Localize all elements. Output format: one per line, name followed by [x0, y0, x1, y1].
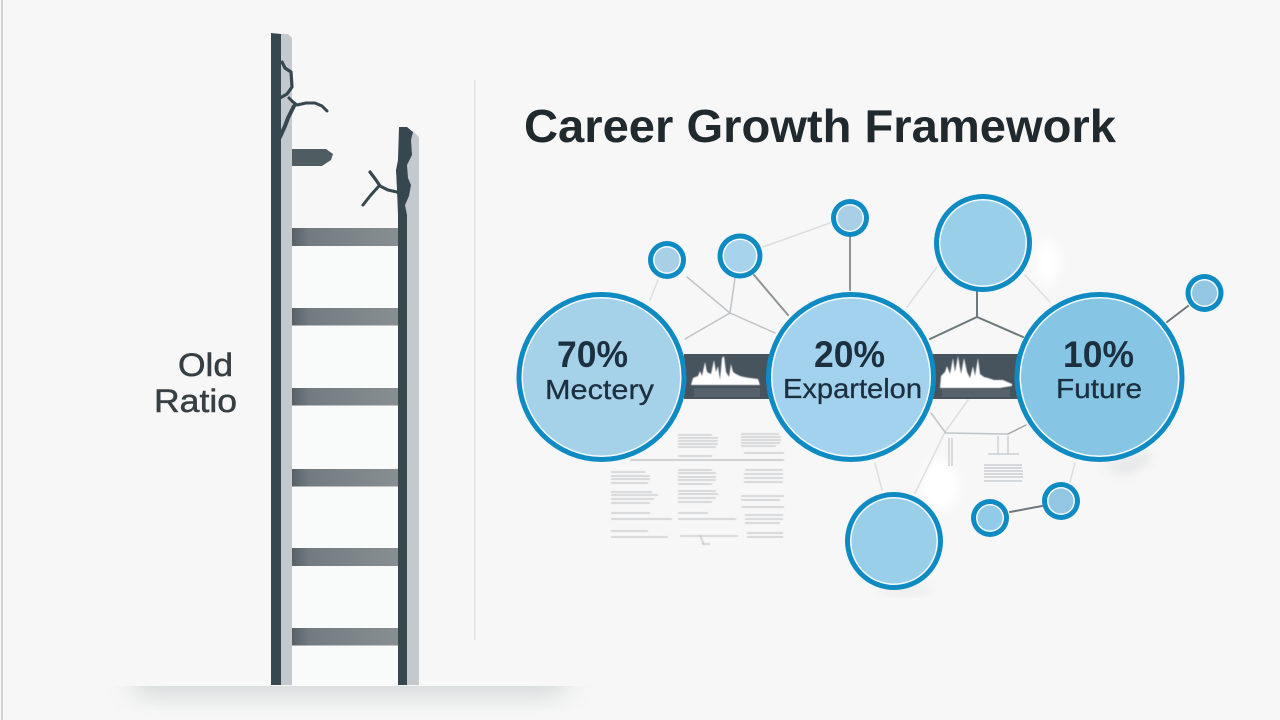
node: 10% Future	[1014, 292, 1184, 462]
label: Old Ratio	[154, 347, 237, 419]
connector bar: 20% to 10%	[932, 354, 1020, 399]
small node 6	[971, 499, 1009, 537]
node: 10% Future: 10%	[1063, 334, 1134, 375]
left rail	[271, 33, 292, 685]
label: Old Ratio: Ratio	[154, 383, 237, 419]
faint document text block	[611, 434, 784, 545]
small node 2	[718, 234, 762, 278]
small node 1	[648, 241, 686, 279]
broken rung stub	[292, 149, 333, 166]
vertical divider	[474, 80, 476, 640]
right rail	[396, 127, 419, 685]
node: 70% Mastery	[516, 292, 686, 462]
small node 5	[1042, 482, 1080, 520]
soft highlights and shadows	[877, 240, 1150, 594]
title: Career Growth Framework	[524, 100, 1116, 152]
connector bar: 70% to 20%	[684, 354, 772, 399]
node: 20% Expansion	[766, 292, 936, 462]
small node 3	[831, 199, 869, 237]
node: large top circle	[934, 194, 1032, 292]
node: 20% Expansion: 20%	[814, 334, 885, 375]
node: large bottom circle	[845, 492, 943, 590]
label: Old Ratio: Old	[178, 347, 233, 383]
faint text block under the 20%-10% connector	[949, 436, 1023, 481]
node: 20% Expansion: Expartelon	[783, 373, 922, 404]
ladder floor shadow	[135, 686, 565, 714]
node: 10% Future: Future	[1056, 373, 1142, 404]
rungs	[292, 228, 398, 646]
cracks	[280, 62, 397, 205]
network connector lines	[650, 223, 1188, 512]
node: 70% Mastery: Mectery	[545, 374, 654, 405]
small node 4	[1186, 274, 1224, 312]
small nodes	[648, 199, 1224, 537]
node: 70% Mastery: 70%	[557, 334, 628, 375]
broken ladder	[271, 33, 419, 686]
